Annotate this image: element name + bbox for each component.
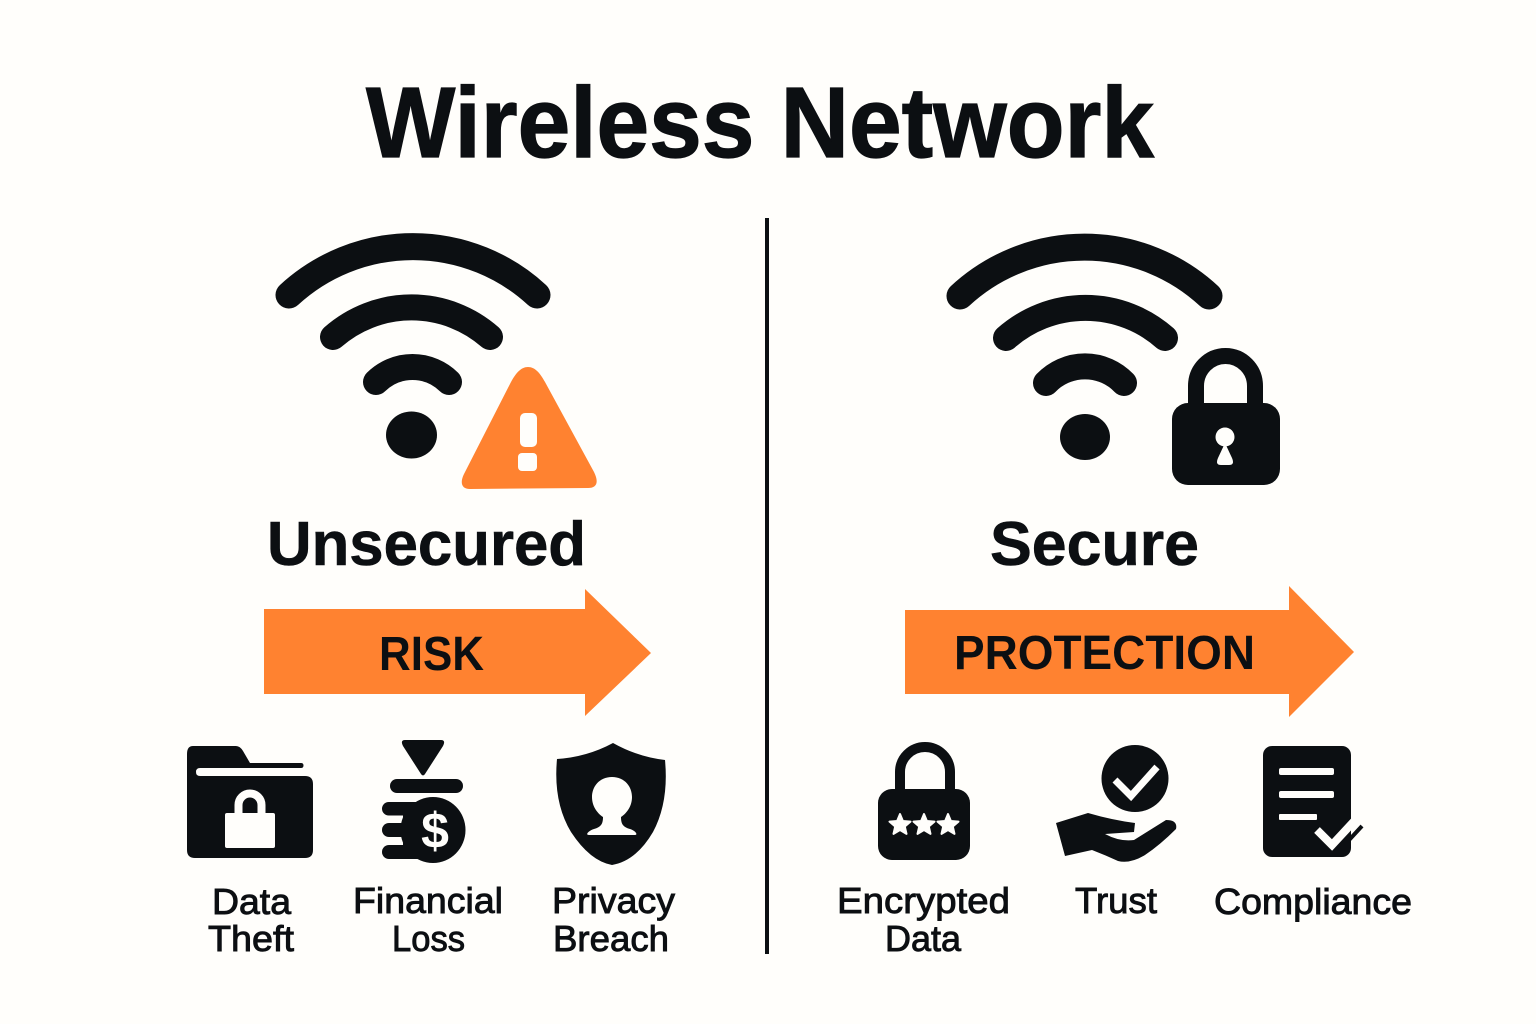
icon: warning triangle (462, 367, 597, 489)
icon: financial loss: $ (421, 803, 449, 859)
arrow: protection: PROTECTION (954, 627, 1255, 680)
label: Privacy Breach (552, 880, 675, 959)
heading: Unsecured: Unsecured (267, 510, 586, 579)
icon: financial loss (382, 740, 466, 863)
label: Financial Loss: Loss (392, 918, 465, 959)
label: Trust: Trust (1075, 880, 1157, 921)
panel: unsecured (187, 247, 675, 959)
icon: encrypted data lock (878, 747, 970, 860)
center divider (765, 218, 769, 954)
arrow: risk (264, 589, 651, 716)
icon: data theft folder (187, 746, 313, 858)
label: Privacy Breach: Breach (553, 918, 669, 959)
title: Wireless Network (366, 67, 1154, 179)
label: Encrypted Data (837, 880, 1010, 959)
label: Data Theft: Theft (208, 918, 294, 959)
label: Financial Loss: Financial (353, 880, 503, 921)
label: Compliance: Compliance (1214, 881, 1412, 922)
heading: Secure: Secure (990, 510, 1199, 579)
icon: wifi signal unsecured (289, 247, 537, 458)
label: Encrypted Data: Data (885, 918, 962, 959)
icon: trust hand and check (1056, 745, 1176, 862)
icon: padlock (1172, 356, 1280, 485)
icon: privacy shield (556, 743, 666, 865)
label: Financial Loss (353, 880, 503, 959)
icon: wifi signal secure (960, 247, 1209, 460)
label: Data Theft (208, 881, 294, 959)
panel: secure (837, 247, 1412, 959)
label: Encrypted Data: Encrypted (837, 880, 1010, 921)
arrow: protection (905, 586, 1354, 717)
label: Data Theft: Data (212, 881, 292, 922)
label: Privacy Breach: Privacy (552, 880, 675, 921)
arrow: risk: RISK (379, 628, 484, 681)
icon: compliance document (1263, 746, 1362, 857)
